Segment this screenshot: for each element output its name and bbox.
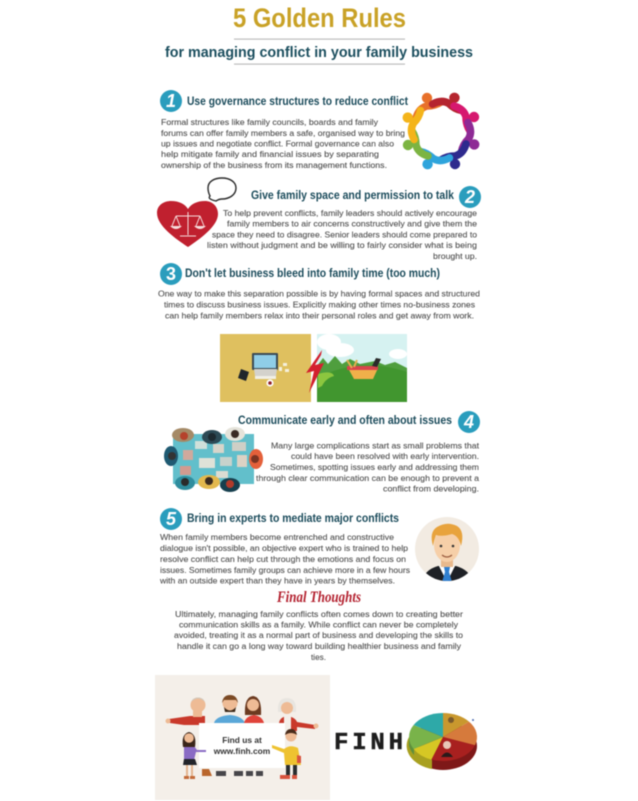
icon: 3D pie chart <box>407 713 477 770</box>
body text 4: conflict from developing. <box>383 484 479 494</box>
number badge 1: 1 <box>166 91 176 111</box>
body text 5 <box>159 532 410 586</box>
body text 2: family members to air concerns constructively and give them the <box>227 218 477 228</box>
body text 1: help mitigate family and financial issues by separating <box>161 149 379 159</box>
heading 3: Don't let business bleed into family time (too much) <box>185 266 440 280</box>
number badge 3: 3 <box>166 264 176 284</box>
icon: speech bubble <box>208 178 236 201</box>
number badge 5 <box>160 508 182 530</box>
body text 1: ownership of the business from its management functions. <box>161 160 387 170</box>
sign with contact text: www.finh.com <box>213 746 270 756</box>
number badge 4: 4 <box>463 412 474 432</box>
body text: final thoughts: communication skills as a family. While conflict can never be completely <box>179 620 459 630</box>
body text 2: listen without judgment and be willing to fairly consider what is being <box>207 240 477 250</box>
body text 1: Formal structures like family councils, boards and family <box>161 117 379 127</box>
sign with contact text: Find us at <box>222 735 262 745</box>
body text: final thoughts: Ultimately, managing family conflicts often comes down to creating better <box>175 609 463 619</box>
body text 5: When family members become entrenched and constructive <box>160 532 394 542</box>
number badge 2: 2 <box>464 187 475 207</box>
body text 2: To help prevent conflicts, family leaders should actively encourage <box>223 208 477 218</box>
number badge 4 <box>458 411 480 433</box>
heading 4: Communicate early and often about issues <box>238 413 452 427</box>
heading: final thoughts: Final Thoughts <box>276 589 361 606</box>
icon: expert portrait <box>415 517 479 582</box>
body text 2: brought up. <box>433 251 477 261</box>
body text: final thoughts <box>174 609 463 662</box>
body text 1: up issues and negotiate conflict. Formal governance can also <box>161 138 394 148</box>
heading 2: Give family space and permission to talk <box>251 188 454 202</box>
body text 3 <box>158 288 480 320</box>
body text 5: issues. Sometimes family groups can achieve more in a few hours <box>160 565 410 575</box>
body text 2 <box>207 208 477 261</box>
body text 3: One way to make this separation possible is by having formal spaces and structured <box>158 288 480 298</box>
section 5 <box>159 508 479 586</box>
infographic <box>155 6 482 800</box>
icon: ring of people <box>396 86 486 176</box>
body text 4: through clear communication can be enough to prevent a <box>256 473 479 483</box>
family illustration <box>166 695 318 779</box>
body text: final thoughts: ties. <box>311 652 326 662</box>
body text 1 <box>161 117 405 170</box>
footer: FINH logo <box>334 713 477 770</box>
body text: final thoughts: avoided, treating it as a normal part of business and developing the skills to <box>174 630 463 640</box>
number badge 3 <box>160 263 182 285</box>
sign with contact text <box>199 723 285 768</box>
icon: lightning bolt <box>306 350 324 393</box>
number badge 1 <box>160 90 182 112</box>
body text 5: dialogue isn't possible, an objective expert who is trained to help <box>160 543 408 553</box>
body text 3: can help family members relax into their personal roles and get away from work. <box>165 310 474 320</box>
section 4 <box>164 411 480 494</box>
body text 4: Sometimes, spotting issues early and addressing them <box>270 462 479 472</box>
illustration: picnic panel <box>317 334 407 402</box>
illustration: meeting table seen from above <box>164 427 263 492</box>
final thoughts <box>174 589 463 662</box>
subtitle: for managing conflict in your family business <box>165 44 473 61</box>
number badge 2 <box>459 186 481 208</box>
section 3 <box>158 263 480 402</box>
body text 1: forums can offer family members a safe, organised way to bring <box>161 128 405 138</box>
heading 5: Bring in experts to mediate major conflicts <box>187 511 399 525</box>
heading 1: Use governance structures to reduce conflict <box>187 94 408 108</box>
body text: final thoughts: handle it can go a long way toward building healthier business and family <box>177 641 462 651</box>
section 1 <box>160 86 486 176</box>
footer: family holding sign <box>155 675 330 800</box>
body text 4 <box>256 440 480 494</box>
logo wordmark: FINH <box>334 730 403 757</box>
body text 5: with an outside expert than they have in years by themselves. <box>159 576 395 586</box>
icon: heart with scales <box>157 201 218 247</box>
body text 2: space they need to disagree. Senior leaders should come prepared to <box>212 230 477 240</box>
title: 5 Golden Rules <box>233 3 406 33</box>
body text 5: resolve conflict can help cut through the emotions and focus on <box>160 554 406 564</box>
body text 4: could have been resolved with early intervention. <box>291 451 479 461</box>
body text 4: Many large complications start as small problems that <box>271 440 480 450</box>
body text 3: times to discuss business issues. Explicitly making other times no-business zones <box>164 300 475 310</box>
number badge 5: 5 <box>166 509 177 529</box>
section 2 <box>157 178 481 261</box>
illustration: work panel with laptop <box>220 334 311 402</box>
